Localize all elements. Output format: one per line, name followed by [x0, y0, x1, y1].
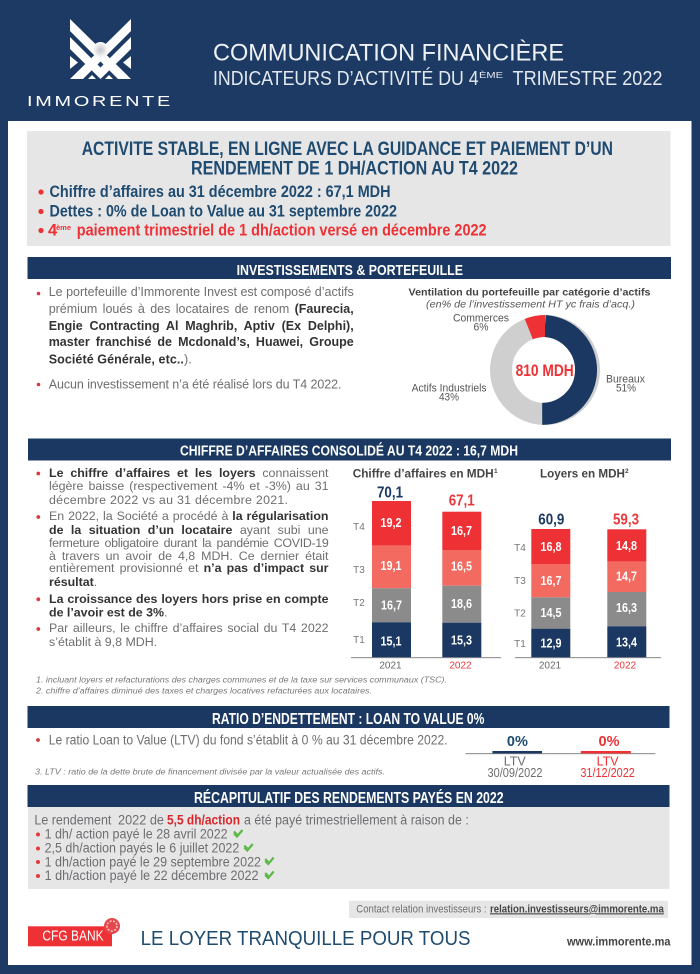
bar chart: loyers: 2021	[539, 660, 562, 672]
bar chart: loyers: 2	[625, 468, 629, 475]
logo: CFG Bank: CFG BANK	[42, 928, 104, 945]
footnotes	[35, 674, 447, 695]
chart: LTV comparison: 30/09/2022	[488, 766, 543, 780]
chart heading: ventilation: Ventilation du portefeuille par catégorie d’actifs	[408, 286, 651, 298]
bar chart: chiffre d'affaires: T1	[353, 635, 365, 646]
title: communication financière: COMMUNICATION FINANCIÈRE	[213, 40, 564, 67]
text block: rendement intro: 5,5 dh/action	[167, 813, 240, 828]
label: actifs industriels: Actifs Industriels	[412, 383, 487, 395]
heading: investissements	[28, 257, 671, 279]
heading: ratio	[28, 706, 670, 728]
chart: LTV comparison: LTV	[597, 755, 619, 769]
text block: portefeuille: Société Générale, etc..).	[49, 352, 192, 366]
donut chart: 810 MDH	[516, 361, 574, 380]
bar chart: chiffre d'affaires: 67,1	[449, 493, 475, 510]
highlight: paiement trimestriel: paiement trimestriel de 1 dh/action versé en décembre 2022	[77, 222, 487, 240]
contact box: Contact relation investisseurs :	[356, 903, 487, 915]
slogan: LE LOYER TRANQUILLE POUR TOUS	[141, 927, 470, 950]
label: actifs industriels	[412, 383, 487, 404]
footnote: LTV: 3. LTV : ratio de la dette brute de financement divisée par la valeur actualisée des actifs.	[35, 767, 385, 777]
list item: juillet: 2,5 dh/action payés le 6 juillet 2022	[45, 841, 239, 856]
chart heading: ventilation	[408, 286, 651, 310]
bar chart: loyers: 14,8	[616, 539, 637, 553]
bar chart: loyers: 12,9	[540, 636, 562, 650]
heading: ratio: RATIO D’ENDETTEMENT : LOAN TO VALUE 0%	[212, 711, 485, 728]
list item: septembre: 1 dh/action payé le 29 septembre 2022	[45, 854, 261, 869]
text block: portefeuille: prémium loués à des locataires de renom (Faurecia,	[49, 302, 354, 316]
subtitle: indicateurs d'activité: ÈME	[479, 71, 503, 80]
text block: rendement intro	[34, 813, 469, 828]
text block: LTV: Le ratio Loan to Value (LTV) du fond s’établit à 0 % au 31 décembre 2022.	[49, 733, 448, 748]
label: commerces	[453, 313, 509, 333]
bar chart: chiffre d'affaires: 15,1	[380, 634, 402, 648]
text block: baisse: légère baisse (respectivement -4% et -3%) au 31	[49, 479, 328, 493]
list item: décembre: 1 dh/action payé le 22 décembre 2022	[45, 868, 258, 883]
chart: LTV comparison: 31/12/2022	[580, 766, 635, 780]
highlight: dettes: Dettes : 0% de Loan to Value au 31 septembre 2022	[50, 203, 397, 221]
text block: régularisation	[36, 508, 329, 589]
donut chart	[412, 313, 645, 414]
text block: portefeuille	[37, 284, 354, 366]
chart: LTV comparison	[466, 734, 655, 780]
heading: activité stable	[82, 138, 613, 180]
heading: chiffre d'affaires	[28, 438, 671, 460]
bar chart: loyers: T2	[514, 608, 526, 620]
bar chart: loyers: 16,3	[616, 601, 637, 615]
label: commerces: 6%	[474, 321, 489, 333]
bar chart: chiffre d'affaires: 1	[494, 468, 498, 475]
text block: chiffre d'affaires social	[36, 620, 329, 649]
text block: portefeuille: Le portefeuille d’Immorente Invest est composé d’actifs	[49, 285, 354, 299]
heading: récapitulatif	[28, 785, 670, 807]
subtitle: indicateurs d'activité: INDICATEURS D’ACTIVITÉ DU 4	[213, 67, 479, 90]
heading: activité stable: RENDEMENT DE 1 DH/ACTION AU T4 2022	[191, 158, 518, 180]
panel: investissements et portefeuille	[28, 257, 671, 414]
bar chart: loyers	[514, 467, 661, 672]
highlight: paiement trimestriel: 4	[48, 222, 58, 240]
text block: régularisation: fermeture obligatoire durant la pandémie COVID-19	[49, 536, 328, 550]
text block: chiffre d'affaires social: s’établit à 9,8 MDH.	[49, 635, 157, 649]
panel: ratio d'endettement	[28, 706, 670, 780]
bar chart: chiffre d'affaires: 16,7	[381, 598, 402, 612]
contact box	[349, 901, 668, 918]
bar chart: loyers: 13,4	[616, 635, 637, 649]
text block: portefeuille: master franchisé de Mcdonald’s, Huawei, Groupe	[49, 335, 354, 349]
text block: chiffre d'affaires social: Par ailleurs, le chiffre d’affaires social du T4 2022	[49, 621, 328, 635]
panel: key highlights	[27, 131, 670, 246]
bar chart: loyers: 60,9	[538, 511, 565, 528]
bar chart: chiffre d'affaires: 18,6	[451, 597, 472, 611]
label: bureaux: Bureaux	[606, 374, 645, 386]
text block: aucun investissement: Aucun investissement n’a été réalisé lors du T4 2022.	[49, 377, 341, 391]
bar chart: chiffre d'affaires: Chiffre d’affaires en MDH	[353, 467, 494, 481]
contact box: relation.investisseurs@immorente.ma	[490, 903, 665, 915]
chart heading: ventilation: (en% de l’investissement HT yc frais d’acq.)	[426, 298, 635, 310]
label: bureaux: 51%	[616, 383, 636, 395]
text block: baisse: décembre 2022 vs au 31 décembre 2021.	[49, 493, 288, 507]
label: actifs industriels: 43%	[439, 392, 459, 404]
bar chart: chiffre d'affaires: T3	[353, 565, 365, 576]
label: commerces: Commerces	[453, 313, 509, 325]
header band	[27, 19, 662, 110]
text block: croissance des loyers	[36, 591, 329, 619]
footnotes: 1. incluant loyers et refacturations des charges communes et de la taxe sur services communaux (TSC).	[36, 674, 447, 684]
panel: chiffre d'affaires consolidé	[28, 438, 671, 695]
bar chart: loyers: 14,5	[540, 606, 562, 620]
bar chart: loyers: T1	[514, 639, 526, 650]
bar chart: loyers: 59,3	[613, 511, 639, 528]
text block: régularisation: à travers un avoir de 4,8 MDH. Ce dernier était	[49, 549, 328, 563]
text block: régularisation: résultat.	[49, 575, 97, 589]
bar chart: chiffre d'affaires: 16,7	[451, 524, 472, 538]
list item: avril: 1 dh/ action payé le 28 avril 2022	[45, 827, 228, 842]
bar chart: chiffre d'affaires: T4	[353, 522, 365, 533]
text block: rendement intro: a été payé trimestriellement à raison de :	[244, 813, 469, 828]
bar chart: loyers: 16,8	[540, 540, 562, 554]
bar chart: chiffre d'affaires: 15,3	[451, 633, 472, 647]
heading: chiffre d'affaires: CHIFFRE D’AFFAIRES CONSOLIDÉ AU T4 2022 : 16,7 MDH	[180, 443, 518, 460]
bar chart: chiffre d'affaires: 19,1	[380, 559, 402, 573]
text block: rendement intro: 2022 de	[118, 813, 164, 828]
chart: LTV comparison: LTV	[504, 755, 526, 769]
bar chart: chiffre d'affaires: 19,2	[380, 516, 402, 530]
icon: Immorente logo: IMMORENTE	[27, 94, 173, 110]
bar chart: chiffre d'affaires: T2	[353, 598, 365, 609]
logo: CFG Bank	[28, 918, 120, 946]
bar chart: chiffre d'affaires: 16,5	[451, 559, 472, 573]
text block: baisse	[36, 465, 329, 507]
subtitle: indicateurs d'activité	[213, 67, 662, 90]
heading: récapitulatif: RÉCAPITULATIF DES RENDEMENTS PAYÉS EN 2022	[194, 790, 504, 807]
panel: récapitulatif des rendements	[28, 785, 670, 889]
bar chart: loyers: 2022	[614, 660, 637, 672]
bar chart: loyers: T4	[514, 543, 526, 554]
bar chart: chiffre d'affaires: 2021	[379, 660, 402, 672]
text block: croissance des loyers: La croissance des loyers hors prise en compte	[49, 592, 328, 606]
text block: croissance des loyers: de l’avoir est de 3%.	[49, 605, 167, 619]
footnotes: 2. chiffre d’affaires diminué des taxes et charges locatives refacturées aux locataires.	[35, 685, 372, 695]
chart: LTV comparison: 0%	[507, 734, 528, 750]
bar chart: chiffre d'affaires	[351, 467, 501, 672]
text block: rendement intro: Le rendement	[34, 813, 112, 828]
website: www.immorente.ma	[566, 935, 671, 949]
label: bureaux	[606, 374, 645, 395]
chart: LTV comparison: 0%	[599, 734, 620, 750]
bar chart: loyers: T3	[514, 576, 526, 587]
text block: régularisation: de la situation d’un locataire ayant subi une	[49, 523, 328, 537]
bar chart: loyers: 16,7	[540, 574, 562, 588]
subtitle: indicateurs d'activité: TRIMESTRE 2022	[512, 67, 662, 90]
text block: régularisation: En 2022, la Société a procédé à la régularisation	[49, 509, 328, 523]
bar chart: loyers: Loyers en MDH	[540, 467, 625, 481]
bar chart: chiffre d'affaires: 70,1	[377, 484, 403, 501]
highlight: chiffre d'affaires: Chiffre d’affaires au 31 décembre 2022 : 67,1 MDH	[50, 183, 390, 201]
heading: investissements: INVESTISSEMENTS & PORTEFEUILLE	[237, 263, 463, 279]
icon: Immorente logo	[27, 19, 173, 110]
highlight: paiement trimestriel: ème	[56, 223, 71, 232]
bar chart: loyers: 14,7	[616, 569, 637, 583]
bar chart: chiffre d'affaires: 2022	[449, 660, 472, 672]
